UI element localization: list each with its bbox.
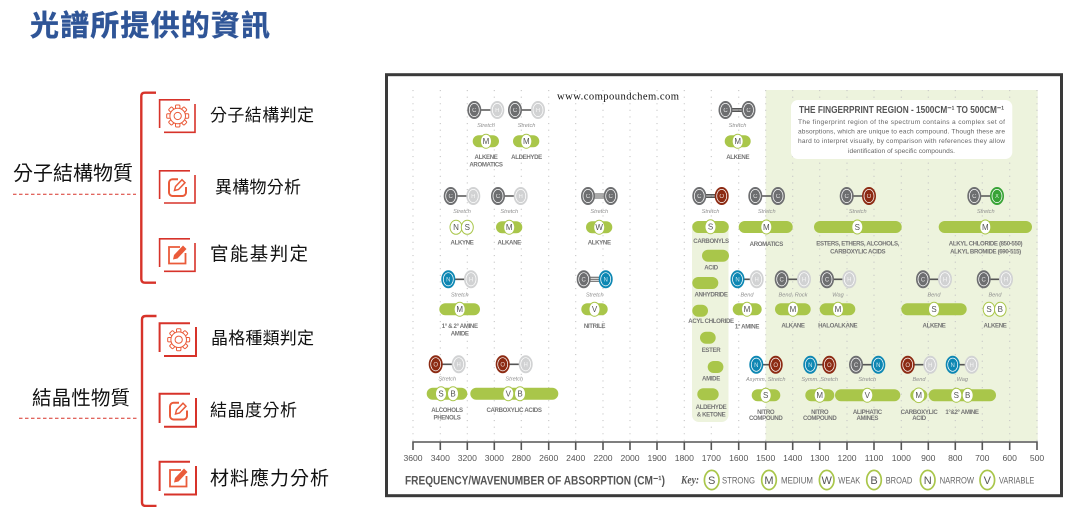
entry: primary and secondary amine wag [929, 356, 996, 416]
entry: alkene aromatics: Stretch [477, 123, 495, 129]
entry: aliphatic amines: V [865, 391, 871, 400]
entry: alkene aromatics: C [472, 108, 477, 114]
entry: alkene C=C: ALKENE [726, 154, 749, 161]
entry: alcohols phenols: Stretch [438, 376, 456, 382]
entry: aliphatic amines: ALIPHATIC [853, 409, 883, 416]
entry: alkyne narrow strong: Stretch [453, 209, 471, 215]
entry: esters, ethers, alcohols: Stretch [849, 209, 867, 215]
entry: primary and secondary amine wag: 1°&2° AMINE [945, 409, 979, 416]
icon: pencil square [160, 462, 196, 494]
entry: alkene bend strong: ALKENE [923, 322, 946, 330]
heading: molecular structure: 分子結構物質 [13, 162, 133, 185]
entry: alkyne narrow strong: C [449, 194, 454, 200]
x axis: 500 [1030, 453, 1044, 463]
bracket [142, 316, 156, 506]
entry: carboxylic acids stretch: CARBOXYLIC ACIDS [486, 407, 542, 414]
entry: alkene aromatics: H [495, 108, 499, 114]
entry: carboxylic acid bend: O [905, 363, 910, 369]
entry: primary amine bend: N [735, 278, 740, 284]
entry: alcohols phenols [427, 355, 467, 422]
entry: carboxylic acids stretch: H [524, 362, 528, 368]
entry: carboxylic acid bend [901, 356, 938, 422]
entry: alkane bend rock: Bend, Rock [779, 292, 809, 298]
entry: nitro compound symmetric: NITRO [811, 409, 829, 416]
entry: carbonyls C=O: ACID [704, 264, 719, 271]
entry: alkyl halides: ALKYL CHLORIDE (850-550) [949, 240, 1023, 248]
entry: alkane: ALKANE [498, 240, 521, 246]
legend key: V [984, 475, 992, 487]
legend key: WEAK [838, 476, 861, 487]
x axis: 2200 [593, 453, 613, 463]
legend key: S [708, 475, 715, 487]
entry: esters, ethers, alcohols: S [855, 223, 860, 232]
entry: primary amine bend [730, 270, 764, 330]
x axis: 1900 [647, 453, 667, 463]
entry: esters, ethers, alcohols [814, 187, 902, 255]
entry: carbonyls C=O: ACYL CHLORIDE [688, 318, 734, 325]
entry: primary and secondary amine wag: N [951, 363, 955, 369]
panel: crystallinity properties [19, 316, 329, 506]
icon: gear [160, 323, 196, 356]
entry: alkyne C≡C: W [595, 223, 603, 232]
fingerprint region callout: absorptions, which are unique to each compound. Though these are [798, 129, 1005, 136]
fingerprint region callout: The fingerprint region of the spectrum contains a complex set of [798, 119, 1005, 126]
entry: aliphatic amines: N [876, 363, 880, 369]
entry: alcohols phenols: H [457, 362, 461, 368]
x axis: 1400 [783, 453, 802, 463]
entry: amine amide [439, 270, 480, 338]
entry: carboxylic acids stretch: V [506, 390, 512, 399]
entry: alkene C=C [718, 101, 756, 161]
entry: alkene aromatics [467, 101, 504, 168]
entry: haloalkane wag [818, 270, 858, 330]
entry: alkane: M [506, 223, 513, 232]
legend key: B [870, 475, 878, 487]
x axis: 2600 [539, 453, 558, 463]
entry: primary and secondary amine wag: S [954, 391, 959, 400]
entry: nitro compound symmetric [801, 356, 838, 422]
entry: alkane [491, 187, 528, 246]
entry: alkene C=C: C [723, 108, 728, 114]
x axis: 3000 [485, 453, 504, 463]
entry: haloalkane wag: M [835, 305, 842, 314]
entry: primary amine bend: H [755, 278, 759, 284]
entry: nitro compound asymmetric: N [754, 363, 758, 369]
bracket [141, 93, 156, 283]
entry: alcohols phenols: ALCOHOLS [431, 407, 463, 414]
entry: carboxylic acids stretch: Stretch [505, 376, 523, 382]
entry: nitro compound asymmetric: S [763, 391, 768, 400]
entry: alcohols phenols: B [450, 390, 456, 399]
entry: esters, ethers, alcohols: C [845, 194, 850, 200]
entry: amine amide: N [446, 278, 450, 284]
entry: alkyne narrow strong: N [453, 223, 459, 232]
entry: alkene bend strong broad: Bend [988, 292, 1002, 298]
fingerprint region callout: THE FINGERPRINT REGION - 1500CM⁻¹ TO 500CM⁻¹ [799, 104, 1004, 116]
legend key: STRONG [722, 476, 755, 487]
entry: nitro compound symmetric: O [827, 363, 832, 369]
entry: carboxylic acids stretch: O [500, 362, 505, 368]
entry: alkane bend rock: C [780, 278, 785, 284]
x axis: 700 [975, 453, 990, 463]
entry: alkene C=C: M [734, 137, 741, 146]
legend key: NARROW [940, 476, 975, 487]
x axis: 1100 [865, 453, 883, 463]
x axis: 2400 [566, 453, 585, 463]
entry: alkyl halides [939, 187, 1032, 255]
x axis: 1500 [756, 453, 775, 463]
entry: carbonyls C=O: C [697, 194, 702, 200]
entry: carbonyls C=O: Stretch [702, 209, 719, 215]
entry: alkene aromatics: M [483, 137, 490, 146]
icon: edit [160, 394, 196, 427]
entry: alkyl halides: ALKYL BROMIDE (690-515) [950, 248, 1021, 255]
entry: alkene aromatics: AROMATICS [469, 162, 503, 168]
entry: aliphatic amines: C [854, 363, 859, 369]
entry: aromatics: AROMATICS [750, 241, 783, 248]
entry: aliphatic amines: Stretch [858, 377, 876, 383]
entry: alkene bend strong broad: C [982, 278, 987, 284]
entry: alkyl halides: C [972, 194, 977, 200]
title: 光譜所提供的資訊 [30, 10, 270, 42]
legend key [680, 470, 1034, 490]
x axis: 1200 [837, 453, 857, 463]
entry: nitro compound symmetric: N [808, 363, 812, 369]
entry: nitro compound asymmetric: COMPOUND [749, 415, 783, 422]
entry: carbonyls C=O: CARBONYLS [693, 238, 729, 245]
entry: aromatics: C [776, 194, 781, 200]
bar: aldehyde and ketone [697, 388, 719, 400]
entry: alkene bend strong: S [931, 305, 937, 314]
icon: edit [160, 171, 195, 203]
entry: carboxylic acid bend: M [915, 391, 922, 400]
bar: ester [700, 332, 716, 344]
entry: carbonyls C=O: ESTER [702, 347, 721, 354]
entry: carbonyls C=O: ALDEHYDE [696, 404, 727, 411]
entry: aromatics [739, 187, 793, 248]
entry: nitro compound asymmetric: O [773, 363, 778, 369]
entry: carbonyls C=O: ANHYDRIDE [694, 292, 728, 298]
entry: alkyne C≡C [581, 187, 618, 246]
entry: alkyne C≡C: C [586, 194, 591, 200]
label: ketone: & KETONE [697, 412, 726, 418]
chart: IR spectrum frame [386, 75, 1062, 496]
entry: alkene bend strong: H [943, 278, 947, 284]
entry: alkene bend strong: C [921, 278, 926, 284]
entry: alkane: C [496, 194, 501, 200]
x axis: 2000 [620, 453, 640, 463]
fingerprint region callout [791, 100, 1012, 159]
entry: amine amide: 1° & 2° AMINE [442, 323, 478, 330]
fingerprint region callout: identification of specific compounds. [848, 148, 955, 155]
entry: alkyne C≡C: ALKYNE [588, 240, 611, 246]
item text: material stress analysis: 材料應力分析 [210, 466, 329, 490]
entry: carboxylic acid bend: H [928, 363, 932, 369]
x axis: 3400 [431, 453, 450, 463]
entry: carbonyls C=O: S [708, 223, 713, 232]
item text: molecular structure determination: 分子結構判定 [210, 106, 314, 125]
entry: alkyne narrow strong: ALKYNE [451, 240, 474, 246]
entry: nitrile: C [582, 278, 587, 284]
entry: aldehyde [508, 101, 545, 161]
legend key: W [822, 475, 833, 487]
legend key: N [924, 475, 932, 487]
x axis: 1300 [810, 453, 829, 463]
entry: haloalkane wag: HALOALKANE [818, 322, 858, 330]
item text: lattice type determination: 晶格種類判定 [211, 329, 314, 348]
x axis: 1600 [729, 453, 748, 463]
entry: alkane bend rock: ALKANE [781, 322, 805, 330]
item text: functional group determination: 官能基判定 [210, 244, 308, 264]
entry: primary amine bend: Bend [740, 292, 754, 298]
entry: carboxylic acids stretch [470, 355, 558, 414]
carbonyl panel background [692, 224, 728, 422]
entry: nitro compound asymmetric [745, 356, 785, 422]
bar: acid [702, 250, 729, 262]
entry: aromatics: M [763, 223, 770, 232]
entry: alkyne C≡C: Stretch [590, 209, 608, 215]
item text: crystallinity analysis: 結晶度分析 [210, 401, 297, 420]
entry: aldehyde: M [523, 137, 530, 146]
entry: alkyne C≡C: C [609, 194, 614, 200]
legend key: Key: [680, 472, 699, 486]
x axis: 1700 [702, 453, 721, 463]
entry: esters, ethers, alcohols: CARBOXYLIC ACIDS [830, 248, 886, 255]
entry: alkane: H [519, 194, 523, 200]
entry: carboxylic acid bend: CARBOXYLIC [901, 409, 938, 416]
entry: alkene bend strong: Bend [927, 292, 941, 298]
entry: alkyne narrow strong: S [465, 223, 470, 232]
entry: aldehyde: ALDEHYDE [511, 154, 542, 161]
entry: alcohols phenols: S [438, 390, 444, 399]
entry: alkyl halides: X [995, 194, 999, 200]
entry: carbonyls C=O: O [719, 194, 724, 200]
entry: alkane bend rock [775, 270, 811, 330]
entry: alkyl halides: Stretch [977, 209, 995, 215]
entry: alkene C=C: C [746, 108, 751, 114]
entry: aromatics: Stretch [758, 209, 776, 215]
bar: acyl chloride [692, 305, 708, 317]
legend key: VARIABLE [999, 476, 1034, 487]
entry: alkene bend strong broad: H [1004, 278, 1008, 284]
heading: crystallinity: 結晶性物質 [32, 388, 130, 410]
entry: primary amine bend: M [744, 305, 751, 314]
x axis: 2800 [512, 453, 531, 463]
entry: alkane bend rock: M [790, 305, 797, 314]
bar: anhydride [692, 277, 718, 289]
entry: alkene bend strong broad: S [986, 305, 992, 314]
fingerprint region callout: hard to interpret visually, by comparison with references they allow [798, 138, 1005, 145]
entry: haloalkane wag: H [847, 278, 851, 284]
entry: nitrile: Stretch [586, 292, 604, 298]
entry: aliphatic amines: AMINES [856, 415, 878, 422]
entry: nitrile: N [604, 278, 608, 284]
entry: alkane bend rock: H [802, 278, 806, 284]
entry: haloalkane wag: Wag [832, 292, 845, 298]
x axis: 900 [921, 453, 936, 463]
legend key: BROAD [886, 476, 912, 487]
entry: alkane: Stretch [500, 209, 518, 215]
entry: amine amide: Stretch [451, 292, 469, 298]
entry: alcohols phenols: PHENOLS [433, 414, 461, 422]
entry: alkyl halides: M [982, 223, 989, 232]
panel: molecular structure properties [13, 93, 314, 283]
x axis [403, 442, 1044, 463]
x axis: 3600 [403, 453, 423, 463]
entry: alkene bend strong broad: B [998, 305, 1003, 314]
legend key: M [764, 475, 774, 487]
source url: www.compoundchem.com [557, 92, 680, 102]
x axis: 1800 [675, 453, 694, 463]
entry: aldehyde: C [513, 108, 518, 114]
entry: carboxylic acid bend: ACID [912, 415, 927, 422]
entry: esters, ethers, alcohols: O [867, 194, 872, 200]
entry: nitro compound symmetric: M [816, 391, 823, 400]
entry: carboxylic acid bend: Bend [912, 377, 926, 383]
entry: carboxylic acids stretch: B [517, 390, 523, 399]
entry: amine amide: M [456, 305, 463, 314]
entry: primary and secondary amine wag: B [965, 391, 970, 400]
entry: carbonyls C=O [688, 187, 734, 418]
entry: nitro compound asymmetric: NITRO [757, 409, 775, 416]
entry: carbonyls C=O: AMIDE [702, 376, 720, 382]
entry: esters, ethers, alcohols: ESTERS, ETHERS, ALCOHOLS, [816, 240, 900, 248]
entry: alkene bend strong broad [977, 270, 1013, 330]
entry: aliphatic amines [835, 356, 900, 422]
entry: nitrile: NITRILE [584, 323, 605, 330]
entry: nitrile [577, 270, 613, 330]
icon: pencil square [160, 239, 195, 271]
x axis: 1000 [892, 453, 911, 463]
x axis: 600 [1003, 453, 1017, 463]
item text: isomer analysis: 異構物分析 [215, 178, 301, 197]
entry: primary and secondary amine wag: Wag [957, 377, 969, 383]
entry: amine amide: AMIDE [451, 330, 469, 338]
entry: alkene aromatics: ALKENE [475, 154, 498, 161]
legend key: MEDIUM [781, 476, 813, 487]
entry: nitrile: V [592, 305, 598, 314]
entry: aldehyde: Stretch [518, 123, 535, 129]
entry: alkyne narrow strong: H [471, 194, 475, 200]
axis title: FREQUENCY/WAVENUMBER OF ABSORPTION (CM⁻¹) [405, 473, 665, 487]
x axis: 800 [948, 453, 963, 463]
fingerprint region background [766, 90, 1038, 441]
entry: alkene bend strong [901, 270, 967, 330]
entry: alkene bend strong broad: ALKENE [984, 322, 1007, 330]
entry: nitro compound asymmetric: Asymm. Stretch [745, 377, 785, 383]
icon: gear [160, 100, 195, 132]
entry: alkyne narrow strong [444, 187, 480, 246]
entry: alkene C=C: Stretch [729, 123, 746, 129]
entry: haloalkane wag: C [825, 278, 830, 284]
entry: primary amine bend: 1° AMINE [735, 324, 759, 330]
entry: alcohols phenols: O [433, 362, 438, 368]
entry: nitro compound symmetric: Symm. Stretch [801, 377, 838, 383]
entry: aldehyde: H [536, 108, 540, 114]
entry: aromatics: C [753, 194, 758, 200]
entry: nitro compound symmetric: COMPOUND [803, 415, 837, 422]
entry: amine amide: H [469, 278, 473, 284]
entry: primary and secondary amine wag: H [970, 363, 974, 369]
x axis: 3200 [458, 453, 477, 463]
bar: amide [708, 361, 723, 373]
